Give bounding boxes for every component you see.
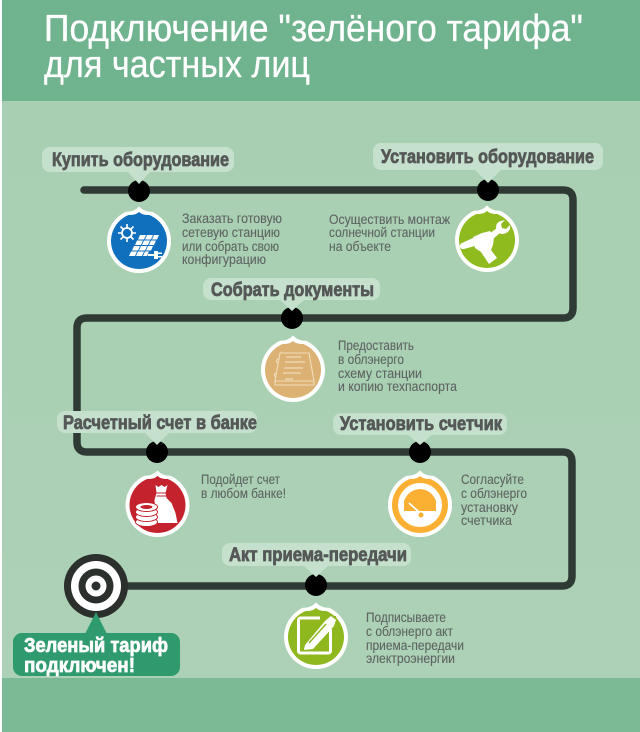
- description: установку: [461, 500, 518, 515]
- description: или собрать свою: [182, 239, 279, 254]
- label bubble: install meter: Установить счетчик: [340, 414, 502, 435]
- description: [338, 338, 457, 394]
- label bubble: acceptance act: Акт приема-передачи: [229, 545, 407, 566]
- node: [128, 180, 150, 202]
- node: [409, 441, 431, 463]
- description: сетевую станцию: [182, 225, 280, 240]
- description: Предоставить: [338, 338, 414, 353]
- icon: money bag: [126, 470, 190, 537]
- title: [44, 8, 583, 86]
- step 6: acceptance act: [222, 543, 464, 669]
- label bubble: buy equipment: Купить оборудование: [52, 150, 229, 171]
- step 2: install equipment: [329, 143, 603, 272]
- background panel: [2, 101, 640, 679]
- step 4: bank account: [57, 411, 286, 537]
- description: в любом банке!: [201, 486, 286, 501]
- description: [201, 472, 286, 501]
- description: и копию техпаспорта: [338, 379, 457, 394]
- label bubble: acceptance act: [222, 543, 411, 577]
- icon: document and pencil: [284, 602, 348, 669]
- node: [146, 441, 168, 463]
- result badge: подключен!: [24, 655, 135, 677]
- description: счетчика: [461, 513, 512, 528]
- icon: meter gauge: [388, 470, 452, 537]
- description: [182, 211, 282, 267]
- description: схему станции: [338, 366, 422, 381]
- step 5: install meter: [333, 413, 527, 537]
- description: с облэнерго акт: [366, 624, 453, 639]
- icon: hand with wrench: [455, 206, 519, 272]
- description: солнечной станции: [329, 225, 435, 240]
- icon: solar panel: [107, 206, 171, 273]
- label bubble: install equipment: Установить оборудование: [381, 147, 594, 168]
- description: приема-передачи: [366, 638, 464, 653]
- description: Согласуйте: [461, 472, 524, 487]
- node: [477, 179, 499, 201]
- description: Осуществить монтаж: [329, 212, 450, 227]
- result badge: Зеленый тариф: [24, 635, 168, 657]
- title: для частных лиц: [44, 44, 310, 86]
- node: [305, 574, 327, 596]
- label bubble: bank account: [57, 411, 257, 445]
- label bubble: install equipment: [373, 143, 603, 183]
- description: в облэнерго: [338, 352, 404, 367]
- finish target: [64, 554, 128, 618]
- description: Заказать готовую: [182, 211, 282, 226]
- label bubble: install meter: [333, 413, 507, 445]
- description: на объекте: [329, 239, 391, 254]
- description: [461, 472, 527, 528]
- description: Подписываете: [366, 610, 446, 625]
- label bubble: bank account: Расчетный счет в банке: [63, 413, 257, 434]
- result badge: [13, 612, 180, 677]
- label bubble: buy equipment: [42, 147, 234, 184]
- node: [281, 307, 303, 329]
- step 1: buy equipment: [42, 147, 282, 273]
- description: Подойдет счет: [201, 472, 280, 487]
- process line: [77, 190, 573, 586]
- footer band: [2, 678, 640, 732]
- description: [329, 212, 450, 254]
- description: электроэнергии: [366, 651, 455, 666]
- step 3: collect documents: [203, 278, 457, 402]
- label bubble: collect documents: [203, 278, 380, 311]
- header band: [2, 0, 640, 101]
- icon: documents: [261, 336, 325, 402]
- label bubble: collect documents: Собрать документы: [211, 280, 374, 301]
- description: конфигурацию: [182, 252, 266, 267]
- title: Подключение "зелёного тарифа": [44, 8, 583, 50]
- description: с облэнерго: [461, 486, 527, 501]
- description: [366, 610, 464, 666]
